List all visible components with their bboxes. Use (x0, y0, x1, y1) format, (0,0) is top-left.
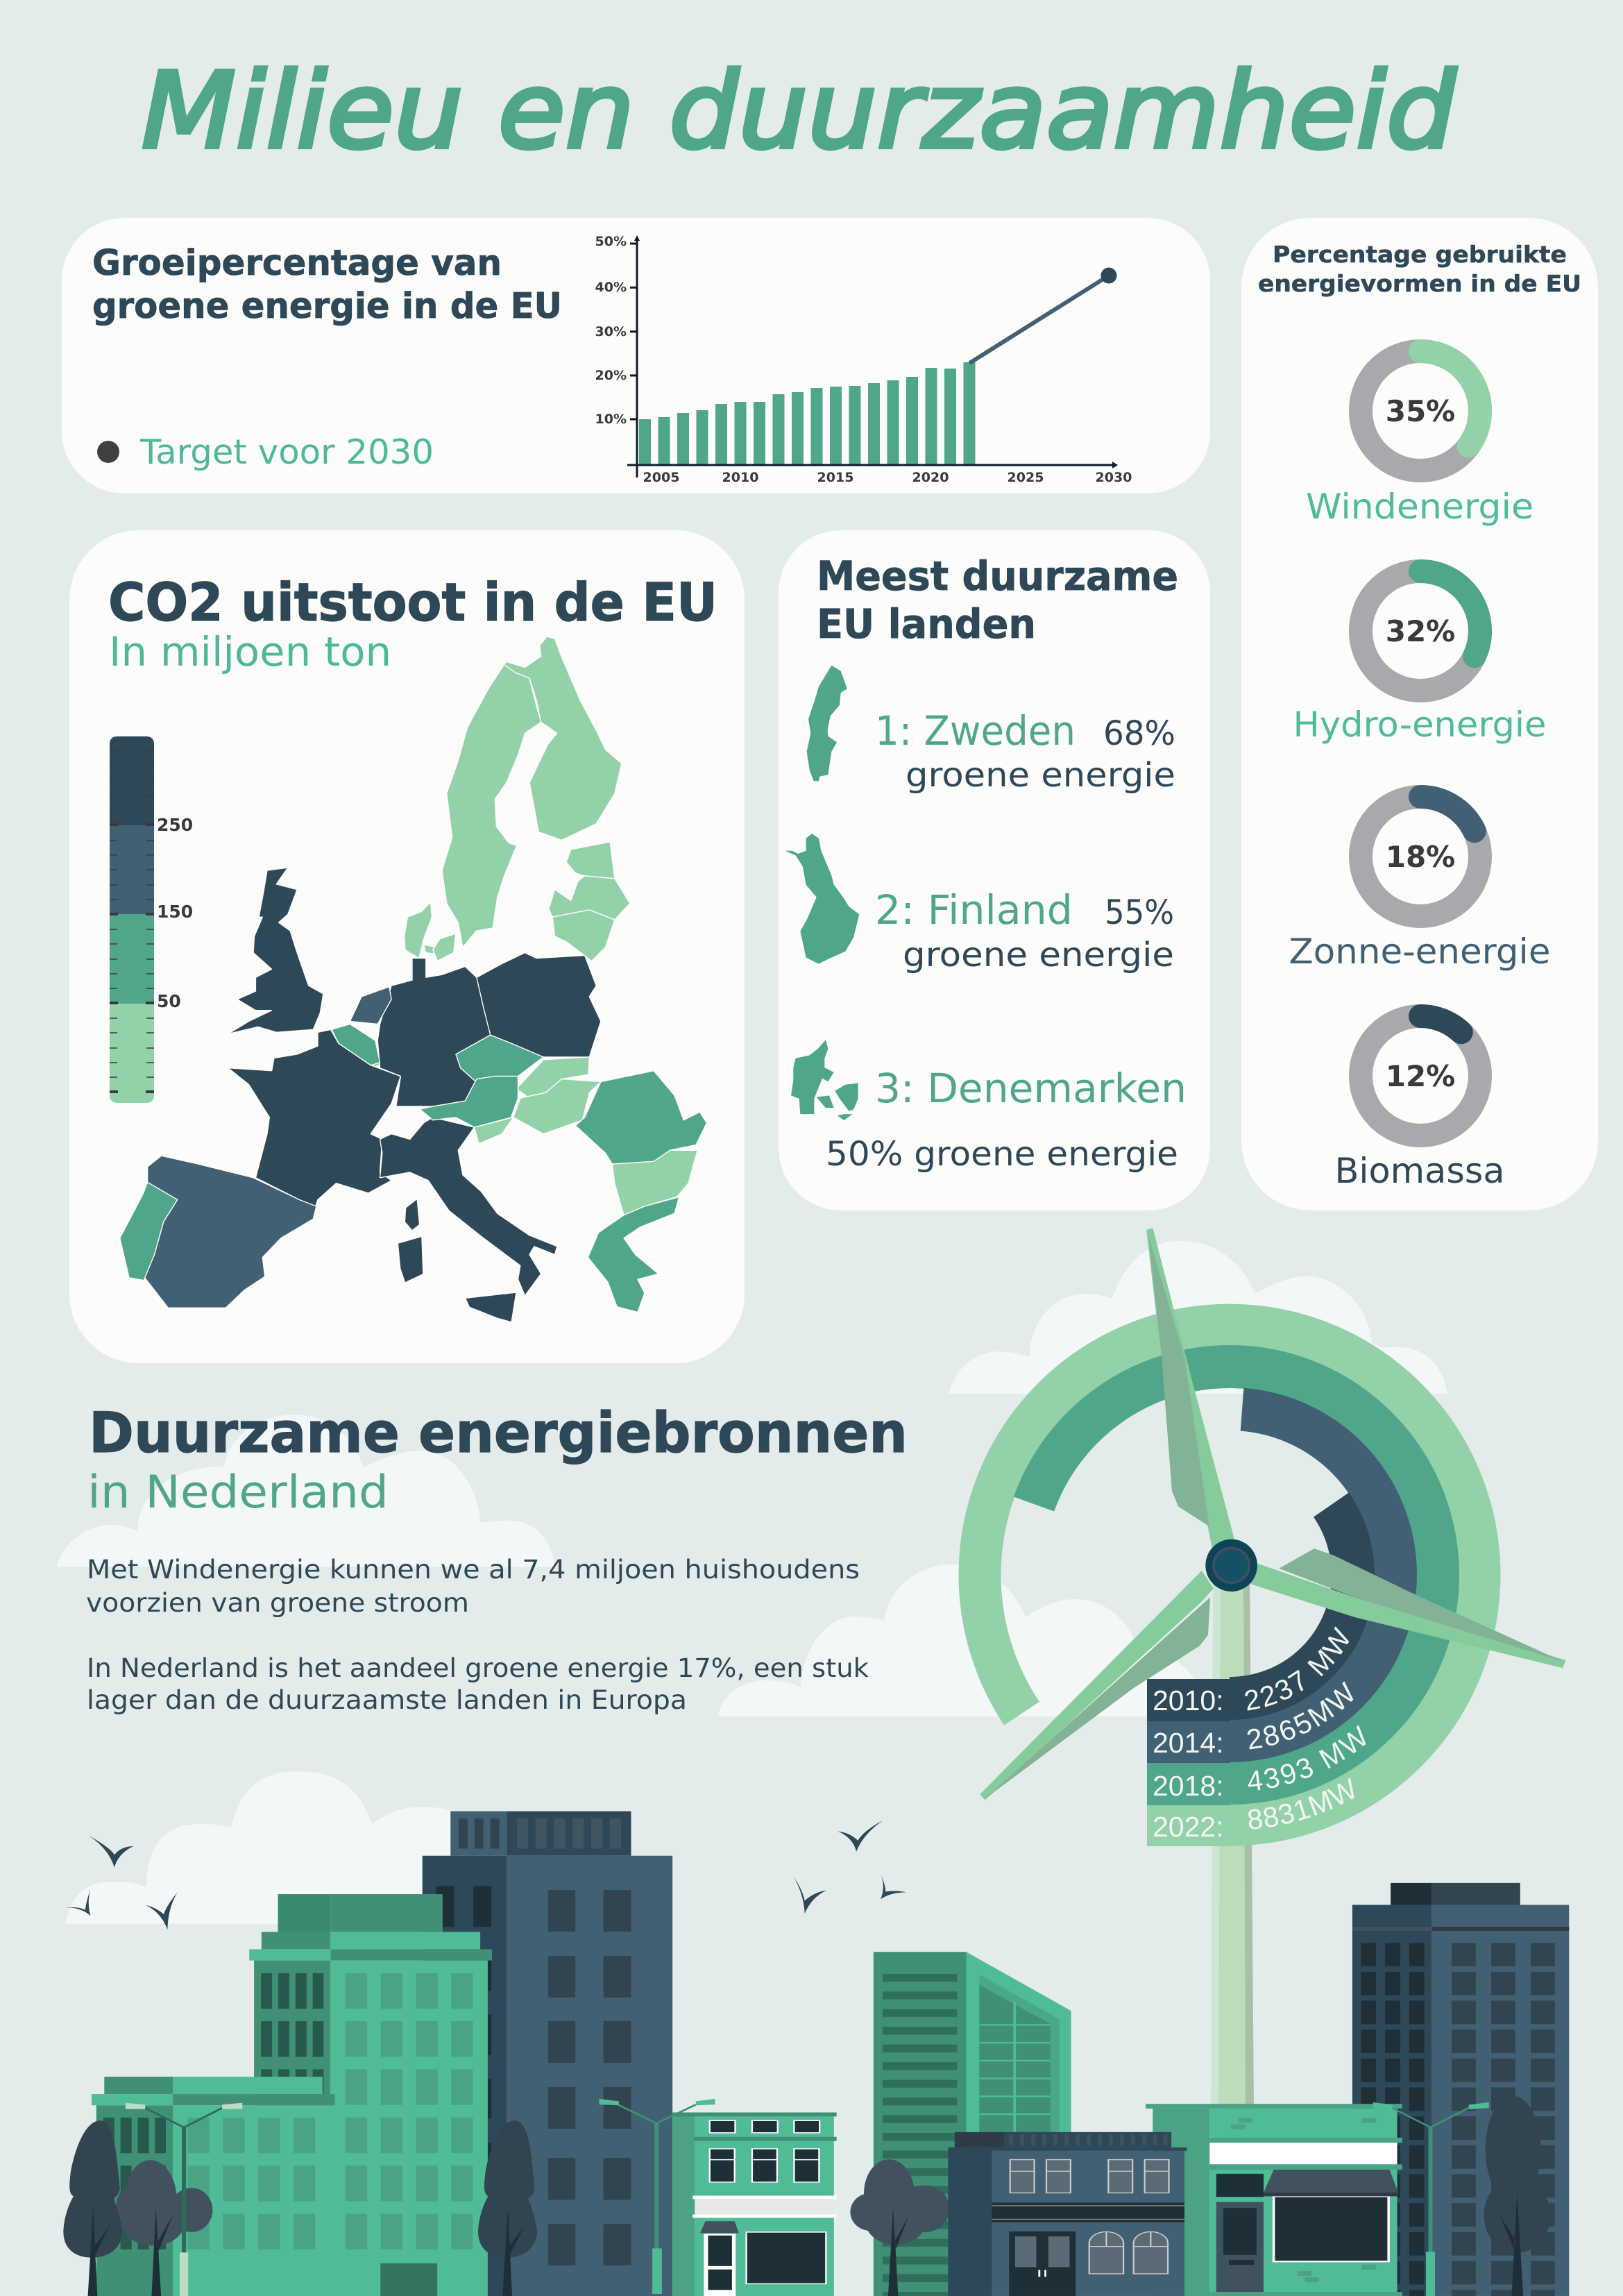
panel: groeipercentage (62, 218, 1210, 493)
text block: aandeel groene energie: lager dan de duurzaamste landen in Europa (87, 1685, 687, 1715)
bar chart: groene energie: 50% (595, 234, 627, 249)
ranking: Finland (875, 886, 1174, 974)
text block: aandeel groene energie: In Nederland is het aandeel groene energie 17%, een stuk (87, 1653, 869, 1683)
bar chart: groene energie: 2010 (722, 470, 758, 485)
heading: groeipercentage: groene energie in de EU (92, 286, 562, 327)
cloud: midden (718, 1564, 1204, 1716)
ranking: Denemarken: 50% groene energie (826, 1135, 1178, 1174)
bar chart: groene energie: 2005 (643, 470, 679, 485)
panel: meest duurzame landen (779, 530, 1210, 1210)
bar chart: groene energie: 20% (595, 368, 627, 383)
donut: windenergie 35%: Windenergie (1306, 487, 1533, 527)
building: right tower (1352, 1883, 1569, 2296)
chart labels (1153, 1626, 1366, 1843)
donut: windenergie 35% (1306, 351, 1533, 527)
tree: right (1484, 2096, 1550, 2296)
bar chart: groene energie: 2015 (817, 470, 853, 485)
donut: hydro-energie 32% (1293, 571, 1546, 745)
windmill blades and hub (980, 1228, 1565, 1800)
legend scale: 150 (157, 902, 193, 922)
text block: windenergie (86, 1555, 860, 1618)
legend: target voor 2030: Target voor 2030 (139, 432, 434, 472)
title: Milieu en duurzaamheid (142, 50, 1456, 172)
donut: zonne-energie 18%: 18% (1386, 840, 1455, 874)
legend scale: 50 (157, 991, 181, 1011)
chart labels: 4393 MW (1248, 1725, 1366, 1791)
chart labels: 2014: (1153, 1727, 1224, 1759)
bar chart: groene energie: 10% (595, 412, 627, 427)
building: green tower (249, 1894, 492, 2296)
text block: windenergie: voorzien van groene stroom (86, 1588, 469, 1618)
heading: groeipercentage: Groeipercentage van (92, 243, 502, 284)
chart labels: 2018: (1153, 1770, 1224, 1802)
text block: aandeel groene energie (87, 1653, 869, 1715)
donut: windenergie 35%: 35% (1386, 394, 1455, 428)
icon: Zweden (807, 666, 847, 781)
heading: meest duurzame: EU landen (817, 600, 1036, 648)
bar chart: groene energie: 2030 (1096, 470, 1132, 485)
building: small house (672, 2113, 837, 2296)
radial chart: windenergie capaciteit (959, 1303, 1500, 1846)
heading: meest duurzame: Meest duurzame (817, 552, 1178, 600)
icon: Finland (785, 834, 859, 964)
building: green shop (1146, 2104, 1402, 2296)
tree: round (850, 2159, 950, 2296)
legend scale (110, 736, 193, 1103)
ranking: Finland: 55% (1105, 893, 1174, 932)
donut: biomassa 12% (1335, 1016, 1504, 1191)
cloud: tekst links (57, 1415, 554, 1567)
bar chart: groene energie: 2020 (912, 470, 949, 485)
ranking: Zweden (875, 707, 1175, 795)
bar chart: groene energie: 2025 (1008, 470, 1044, 485)
heading: energievormen: Percentage gebruikte (1273, 241, 1567, 268)
street lamp right (1373, 2102, 1489, 2296)
bar chart: groene energie (595, 234, 1132, 485)
building: dark tower (423, 1812, 672, 2296)
donut: hydro-energie 32%: 32% (1386, 614, 1455, 648)
heading: energievormen: energievormen in de EU (1258, 270, 1581, 297)
city right (838, 1821, 1569, 2296)
chart labels: 8831MW (1248, 1778, 1354, 1830)
tree: tall centre (478, 2120, 537, 2296)
heading: meest duurzame (817, 552, 1178, 648)
building: navy house (948, 2132, 1187, 2296)
birds left (65, 1835, 826, 1930)
chart labels: 2022: (1153, 1811, 1224, 1843)
birds right (838, 1821, 906, 1899)
heading: energievormen (1258, 241, 1581, 297)
bar chart: groene energie: 40% (595, 280, 627, 295)
donut: zonne-energie 18% (1289, 797, 1550, 972)
map: EU CO2 uitstoot (120, 636, 706, 1322)
ranking: Denemarken (826, 1065, 1187, 1174)
bar chart: groene energie: 30% (595, 324, 627, 339)
panel: CO2 uitstoot (69, 530, 745, 1363)
text block: windenergie: Met Windenergie kunnen we al 7,4 miljoen huishoudens (87, 1555, 860, 1585)
tree: tall left (63, 2120, 122, 2296)
donut: hydro-energie 32%: Hydro-energie (1293, 704, 1546, 745)
building: green low block (92, 2077, 334, 2296)
ranking: Zweden: groene energie (906, 756, 1175, 795)
heading: groeipercentage (92, 243, 562, 327)
subheading: in Nederland: in Nederland (87, 1467, 389, 1519)
cloud: stad links (65, 1771, 466, 1924)
donut: biomassa 12%: Biomassa (1335, 1151, 1504, 1191)
panel: energievormen (1241, 218, 1598, 1210)
icon: Denemarken (791, 1040, 858, 1120)
ranking: Zweden: 68% (1103, 714, 1175, 753)
cloud: boven windmolen (949, 1241, 1447, 1394)
legend scale: 250 (157, 815, 193, 835)
heading: CO2 uitstoot: CO2 uitstoot in de EU (108, 571, 717, 633)
city left (63, 1812, 837, 2296)
street lamp centre (600, 2099, 715, 2294)
ranking: Denemarken: 3: Denemarken (875, 1065, 1187, 1112)
subheading: in miljoen ton: In miljoen ton (109, 628, 391, 675)
windmill tower (1211, 1576, 1254, 2110)
heading: duurzame energiebronnen: Duurzame energiebronnen (89, 1401, 908, 1465)
donut: biomassa 12%: 12% (1386, 1059, 1455, 1093)
building: glass tower (874, 1952, 1071, 2296)
chart labels: 2865MW (1248, 1681, 1353, 1749)
ranking: Finland: 2: Finland (875, 886, 1073, 934)
street lamp left (126, 2103, 242, 2296)
ranking: Zweden: 1: Zweden (875, 707, 1076, 754)
tree: medium (116, 2160, 212, 2296)
donut: zonne-energie 18%: Zonne-energie (1289, 931, 1550, 972)
chart labels: 2237 MW (1245, 1626, 1349, 1711)
chart labels: 2010: (1153, 1685, 1224, 1716)
ranking: Finland: groene energie (903, 936, 1174, 974)
